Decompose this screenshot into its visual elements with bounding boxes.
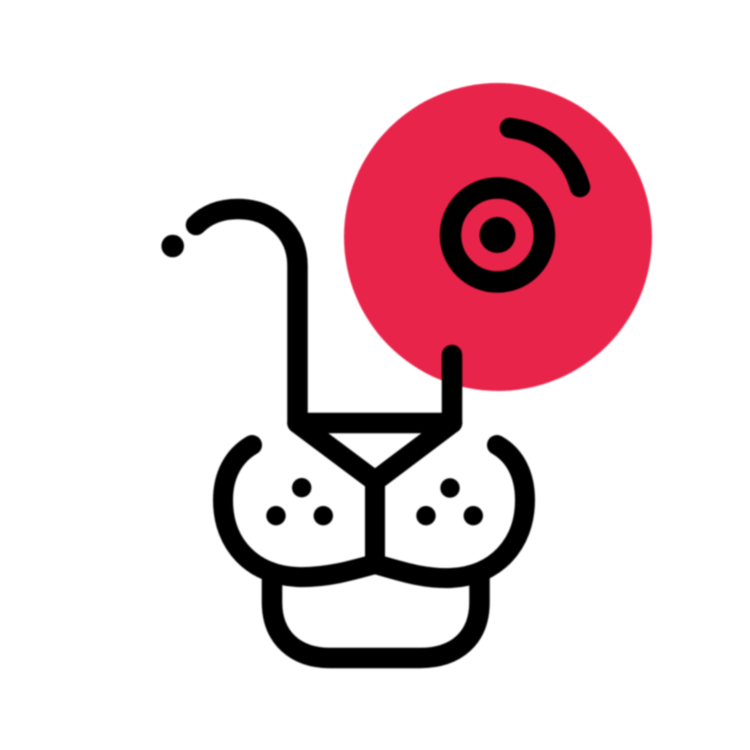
left cheek	[223, 445, 375, 577]
red circle	[344, 83, 652, 391]
disc highlight arc	[510, 128, 580, 187]
disc rings	[450, 188, 544, 282]
left whisker dots	[266, 478, 333, 525]
left ear dot	[161, 235, 184, 257]
nose triangle	[298, 423, 452, 481]
muzzle centre line	[365, 481, 385, 564]
chin	[272, 578, 480, 658]
right cheek	[375, 445, 525, 578]
hook line and nose bridge	[196, 209, 452, 423]
right whisker dots	[416, 478, 483, 525]
